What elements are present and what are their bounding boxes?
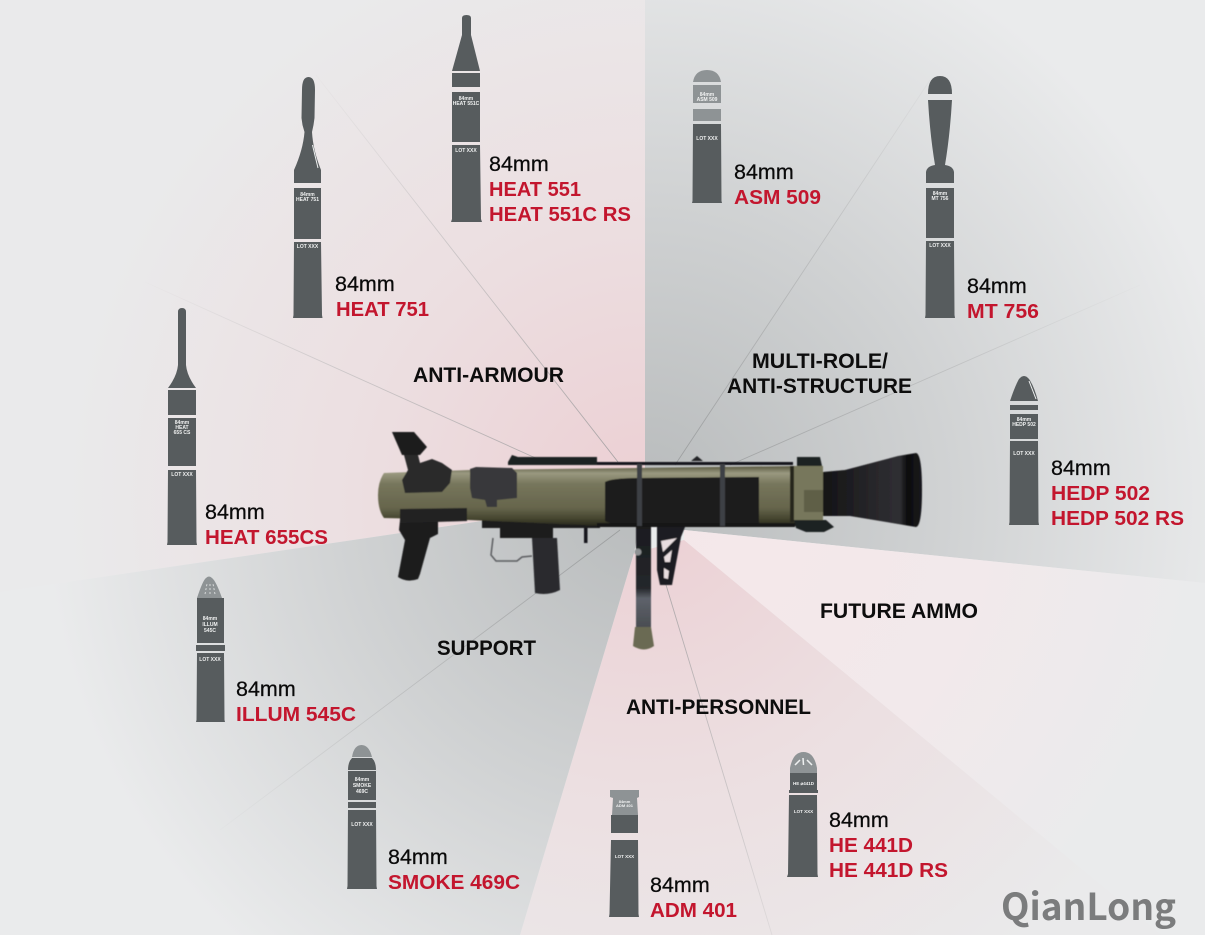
label: HEAT 751: 84mm bbox=[335, 272, 395, 296]
ammo: HEAT 751 bbox=[293, 77, 429, 321]
ammo: ADM 401: LOT XXX bbox=[615, 854, 634, 859]
front grip bbox=[398, 518, 438, 581]
ammo: ADM 401 bbox=[609, 790, 737, 922]
sector: anti-personnel bbox=[520, 540, 1205, 935]
label: ADM 401 bbox=[650, 873, 737, 922]
ammo: HE 441D: HE ⌀441D bbox=[793, 781, 815, 786]
top edge bbox=[0, 0, 1205, 2]
ammo: ASM 509: ASM 509 bbox=[697, 97, 718, 103]
label: ILLUM 545C: ILLUM 545C bbox=[236, 703, 356, 726]
ammo: HE 441D: LOT XXX bbox=[794, 809, 813, 814]
ammo: HEAT 551: HEAT 551C bbox=[453, 101, 480, 107]
label: HE 441D: HE 441D bbox=[829, 834, 913, 857]
venturi collar bbox=[790, 457, 834, 532]
label: HEDP 502: HEDP 502 bbox=[1051, 482, 1150, 505]
ammo: SMOKE 469C: 84mm bbox=[355, 777, 370, 783]
ammo: ADM 401: ADM 401 bbox=[616, 803, 634, 808]
label: ILLUM 545C: 84mm bbox=[236, 677, 296, 701]
label: SMOKE 469C: SMOKE 469C bbox=[388, 871, 520, 894]
ammo: ILLUM 545C: 545C bbox=[204, 628, 216, 634]
ammo: ILLUM 545C: ILLUM bbox=[202, 622, 218, 628]
label: HE 441D: 84mm bbox=[829, 808, 889, 832]
wrap sleeve bbox=[605, 477, 759, 525]
grip rail bbox=[400, 508, 467, 523]
ammo: HEAT 655CS bbox=[167, 308, 328, 549]
main tube bbox=[378, 466, 800, 526]
label: ASM 509: ASM 509 bbox=[734, 186, 821, 209]
sector: future ammo bbox=[684, 530, 1205, 935]
trigger guard bbox=[491, 538, 532, 561]
label: MT 756 bbox=[967, 274, 1039, 323]
pin bbox=[584, 527, 588, 543]
ammo: ADM 401: 84mm bbox=[619, 799, 631, 804]
ammo: HEDP 502: LOT XXX bbox=[1013, 451, 1035, 457]
label: ADM 401: 84mm bbox=[650, 873, 710, 897]
bipod leg bbox=[633, 525, 654, 650]
ammo: MT 756: 84mm bbox=[933, 191, 948, 197]
ammo: HEAT 655CS: 655 CS bbox=[174, 430, 191, 436]
label: HEAT 551: 84mm bbox=[489, 152, 549, 176]
label: ASM 509: 84mm bbox=[734, 160, 794, 184]
label: ADM 401: ADM 401 bbox=[650, 899, 737, 922]
sector: anti-armour bbox=[0, 0, 645, 592]
sleeve bands bbox=[637, 464, 725, 526]
label: HEAT 751 bbox=[335, 272, 429, 321]
ammo: ILLUM 545C: LOT XXX bbox=[199, 657, 221, 663]
sector: multi-role / anti-structure bbox=[645, 0, 1205, 583]
ammo: SMOKE 469C bbox=[347, 745, 520, 894]
label: MT 756: 84mm bbox=[967, 274, 1027, 298]
ammo: MT 756: LOT XXX bbox=[929, 243, 951, 249]
label: HEAT 655CS: 84mm bbox=[205, 500, 265, 524]
heading: future ammo: FUTURE AMMO bbox=[820, 600, 978, 623]
heading: anti-personnel: ANTI-PERSONNEL bbox=[626, 696, 811, 719]
ammo: MT 756: MT 756 bbox=[932, 196, 949, 202]
ammo: HE 441D bbox=[787, 752, 948, 882]
ammo: HEAT 551: 84mm bbox=[459, 96, 474, 102]
label: HEAT 551: HEAT 551C RS bbox=[489, 203, 631, 226]
sight bbox=[392, 432, 452, 493]
label: SMOKE 469C bbox=[388, 845, 520, 894]
bottom shadow line bbox=[597, 523, 795, 527]
label: ASM 509 bbox=[734, 160, 821, 209]
label: HEDP 502: HEDP 502 RS bbox=[1051, 507, 1184, 530]
label: ILLUM 545C bbox=[236, 677, 356, 726]
ammo: HEAT 751: HEAT 751 bbox=[296, 197, 319, 203]
watermark: QianLong bbox=[1001, 877, 1176, 931]
label: HEDP 502 bbox=[1051, 456, 1184, 530]
label: HEAT 751: HEAT 751 bbox=[336, 298, 429, 321]
heading: multi-role anti-structure: MULTI-ROLE/ bbox=[752, 350, 888, 373]
magazine bbox=[532, 538, 560, 594]
weapon: recoilless rifle bbox=[378, 432, 922, 650]
divider rays bbox=[145, 75, 1140, 935]
heading: support: SUPPORT bbox=[437, 637, 536, 660]
ammo: ILLUM 545C: 84mm bbox=[203, 616, 218, 622]
ammo: ASM 509 bbox=[692, 70, 821, 209]
heading: multi-role anti-structure bbox=[727, 350, 912, 398]
ammo: HEAT 655CS: 84mm bbox=[175, 420, 190, 426]
ammo: SMOKE 469C: SMOKE bbox=[353, 783, 372, 789]
label: HE 441D: HE 441D RS bbox=[829, 859, 948, 882]
ammo: HEAT 551 bbox=[451, 15, 631, 226]
ammo: ASM 509: LOT XXX bbox=[696, 136, 718, 142]
ammo: SMOKE 469C: 469C bbox=[356, 789, 368, 795]
ammo: HEDP 502: HEDP 502 bbox=[1012, 422, 1036, 428]
label: MT 756: MT 756 bbox=[967, 300, 1039, 323]
ammo: ILLUM 545C bbox=[196, 576, 356, 726]
ammo: HEAT 751: LOT XXX bbox=[297, 244, 319, 250]
label: HEAT 551: HEAT 551 bbox=[489, 178, 581, 201]
ammo: HEAT 751: 84mm bbox=[300, 192, 315, 198]
venturi cone bbox=[823, 453, 922, 527]
label: HE 441D bbox=[829, 808, 948, 882]
lower rail bbox=[482, 518, 600, 538]
label: HEAT 655CS bbox=[205, 500, 328, 549]
label: HEAT 655CS: HEAT 655CS bbox=[205, 526, 328, 549]
top rail bbox=[508, 455, 793, 465]
heading: multi-role anti-structure: ANTI-STRUCTURE bbox=[727, 375, 912, 398]
sector: support bbox=[0, 497, 645, 935]
ammo: HEAT 655CS: LOT XXX bbox=[171, 472, 193, 478]
ammo: HEAT 655CS: HEAT bbox=[175, 425, 189, 431]
label: HEAT 551 bbox=[489, 152, 631, 226]
ammo: HEDP 502: 84mm bbox=[1017, 417, 1032, 423]
label: SMOKE 469C: 84mm bbox=[388, 845, 448, 869]
folding brace bbox=[657, 527, 685, 585]
ammo: ASM 509: 84mm bbox=[700, 92, 715, 98]
ammo: MT 756 bbox=[925, 76, 1039, 323]
ammo: SMOKE 469C: LOT XXX bbox=[351, 822, 373, 828]
label: HEDP 502: 84mm bbox=[1051, 456, 1111, 480]
ammo: HEAT 551: LOT XXX bbox=[455, 148, 477, 154]
side mount bbox=[470, 467, 517, 507]
heading: anti-armour: ANTI-ARMOUR bbox=[413, 364, 564, 387]
ammo: HEDP 502 bbox=[1009, 376, 1184, 530]
